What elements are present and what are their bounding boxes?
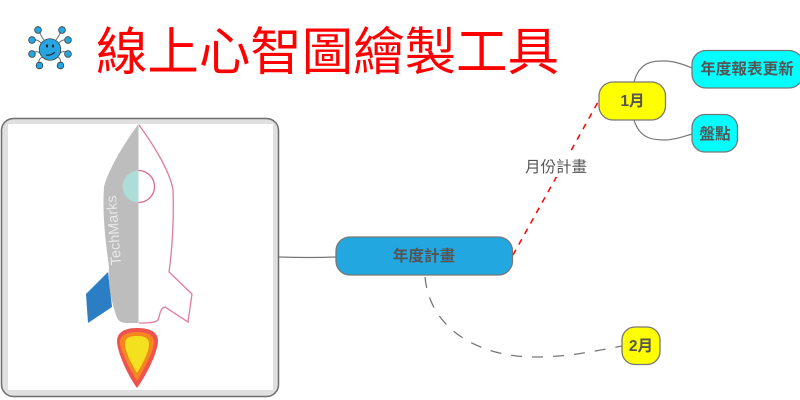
node: inventory [692,114,738,152]
node: January: 1月 [620,93,645,110]
node: February [622,327,660,364]
icon: blue fin [86,272,112,323]
rocket brand text: TechMarks [104,195,125,266]
node: February: 2月 [629,338,653,355]
icon: flame [117,328,158,388]
node: January [599,82,666,120]
rocket right outline [139,125,192,323]
connector: January to inventory [634,120,692,140]
rocket left half [103,124,138,323]
rocket window [122,170,138,202]
panel: rocket image [2,118,278,396]
node: yearly plan [336,237,512,275]
connector label: monthly plan: 月份計畫 [525,158,587,176]
connector: image to yearly plan [279,256,336,258]
node: inventory: 盤點 [699,124,731,143]
node: annual report update [692,50,800,88]
node: annual report update: 年度報表更新 [700,59,794,78]
connector: yearly plan to January (dashed red) [513,102,598,255]
connector: yearly plan to February (dashed) [425,277,622,357]
node: yearly plan: 年度計畫 [393,246,455,265]
icon: smiling mind map [29,27,71,69]
title: 線上心智圖繪製工具 [96,10,559,85]
connector: January to report update [634,61,692,82]
